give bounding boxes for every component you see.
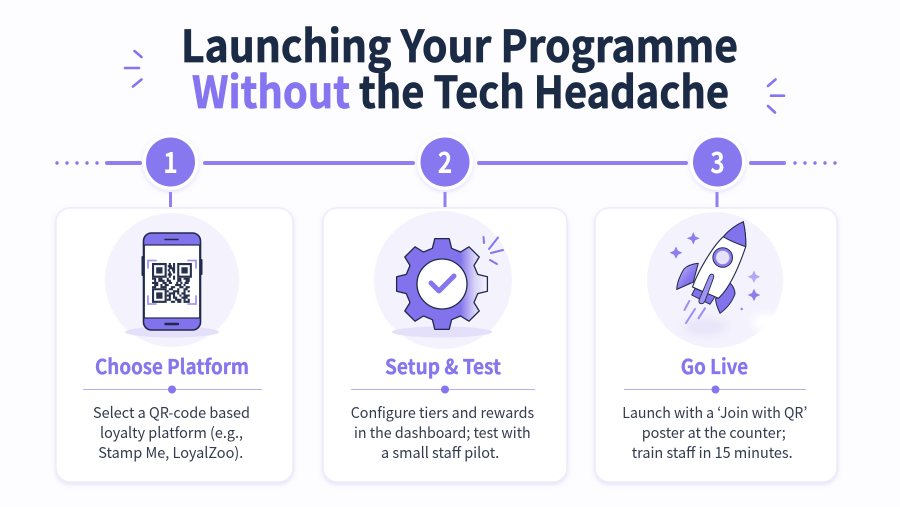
heading: Setup & Test [385,350,501,380]
panel: go live [595,208,837,482]
body text: train staff in 15 minutes. [632,442,793,463]
body text: poster at the counter; [642,422,786,443]
icon: gear with check [397,237,503,329]
title: Launching Your Programme [181,11,738,75]
title [181,11,738,121]
body text: Stamp Me, LoyalZoo). [98,442,243,463]
body text: Configure tiers and rewards [351,402,534,423]
heading: Go Live [681,350,748,380]
body text [622,402,807,463]
divider [624,386,806,394]
body text: Select a QR-code based [93,402,250,423]
step 1 badge: 1 [163,140,178,182]
panel: choose platform [56,208,293,482]
divider [83,386,262,394]
body text: a small staff pilot. [381,442,499,463]
title: Without the Tech Headache [192,57,729,121]
icon: rocket [677,222,746,323]
timeline [55,134,837,207]
body text: Launch with a ‘Join with QR’ [622,402,807,423]
step 2 badge: 2 [438,140,452,182]
step 3 badge: 3 [710,140,725,182]
icon: right sparkle [768,80,784,112]
heading: Choose Platform [95,350,249,380]
body text [351,402,534,463]
step 3 badge [690,134,746,190]
icon: stars [670,232,760,310]
panel: setup and test [323,208,567,482]
step 1 badge [142,134,198,190]
icon: phone with QR code [142,233,202,330]
step 2 badge [417,134,473,190]
body text: in the dashboard; test with [354,422,531,443]
divider [351,386,535,394]
body text: loyalty platform (e.g., [100,422,243,443]
icon: left sparkle [125,51,142,86]
body text [93,402,250,463]
